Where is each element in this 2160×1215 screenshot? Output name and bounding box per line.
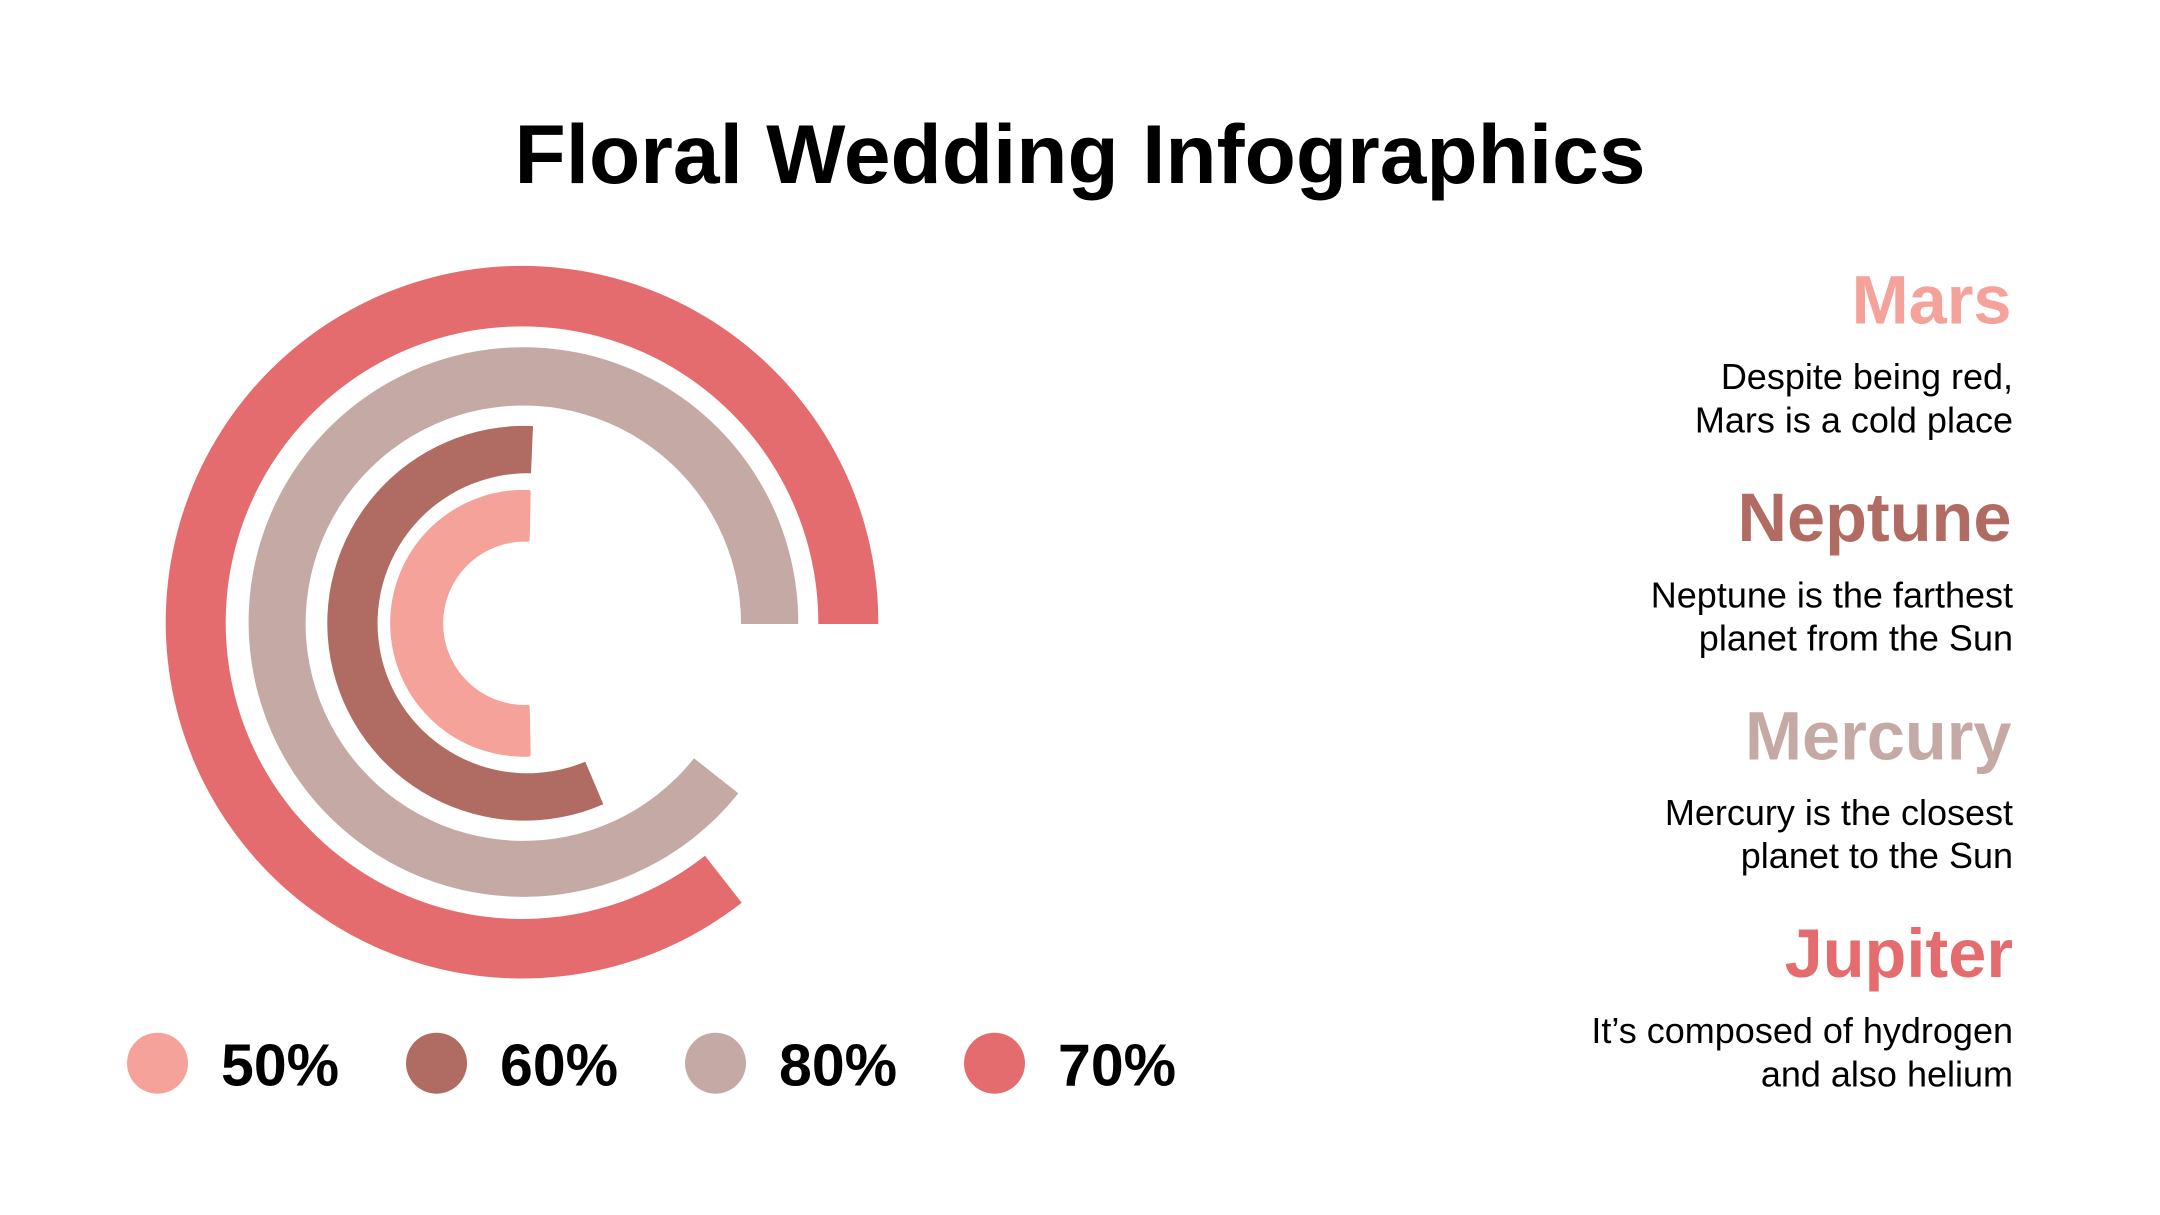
legend item: 70%: 70%	[1058, 1032, 1176, 1098]
text block: Mars	[1695, 262, 2013, 440]
text block: Mercury: Mercury is the closest	[1665, 792, 2013, 833]
legend item: 70%	[964, 1032, 1176, 1098]
title: Floral Wedding Infographics	[514, 107, 1646, 201]
legend item: 60%	[406, 1032, 618, 1098]
legend item: 80%	[685, 1032, 897, 1098]
ring: Mercury 80%	[249, 347, 798, 897]
legend item: 60%: 60%	[500, 1032, 618, 1098]
text block: Neptune: Neptune	[1738, 479, 2012, 556]
ring: Neptune 60%	[327, 426, 603, 821]
text block: Mars: Mars is a cold place	[1695, 400, 2013, 440]
text block: Mercury: Mercury	[1745, 698, 2012, 774]
text block: Jupiter: It’s composed of hydrogen	[1591, 1010, 2013, 1051]
text block: Neptune: Neptune is the farthest	[1651, 574, 2013, 616]
text block: Neptune: planet from the Sun	[1699, 618, 2013, 658]
text block: Jupiter	[1591, 915, 2013, 1094]
legend item: 50%: 50%	[221, 1032, 339, 1098]
text block: Jupiter: and also helium	[1761, 1054, 2013, 1094]
legend	[127, 1032, 1176, 1098]
ring: Jupiter 70%	[166, 266, 878, 978]
text block: Mercury: planet to the Sun	[1741, 835, 2013, 876]
text block: Mercury	[1665, 698, 2013, 876]
text block: Mars: Despite being red,	[1721, 356, 2013, 397]
legend item: 50%	[127, 1032, 339, 1098]
text block: Jupiter: Jupiter	[1785, 915, 2013, 992]
legend item: 80%: 80%	[779, 1032, 897, 1098]
text block: Neptune	[1651, 479, 2013, 658]
ring: Mars 50%	[392, 492, 529, 755]
text block: Mars: Mars	[1852, 262, 2012, 338]
radial chart	[166, 266, 878, 978]
